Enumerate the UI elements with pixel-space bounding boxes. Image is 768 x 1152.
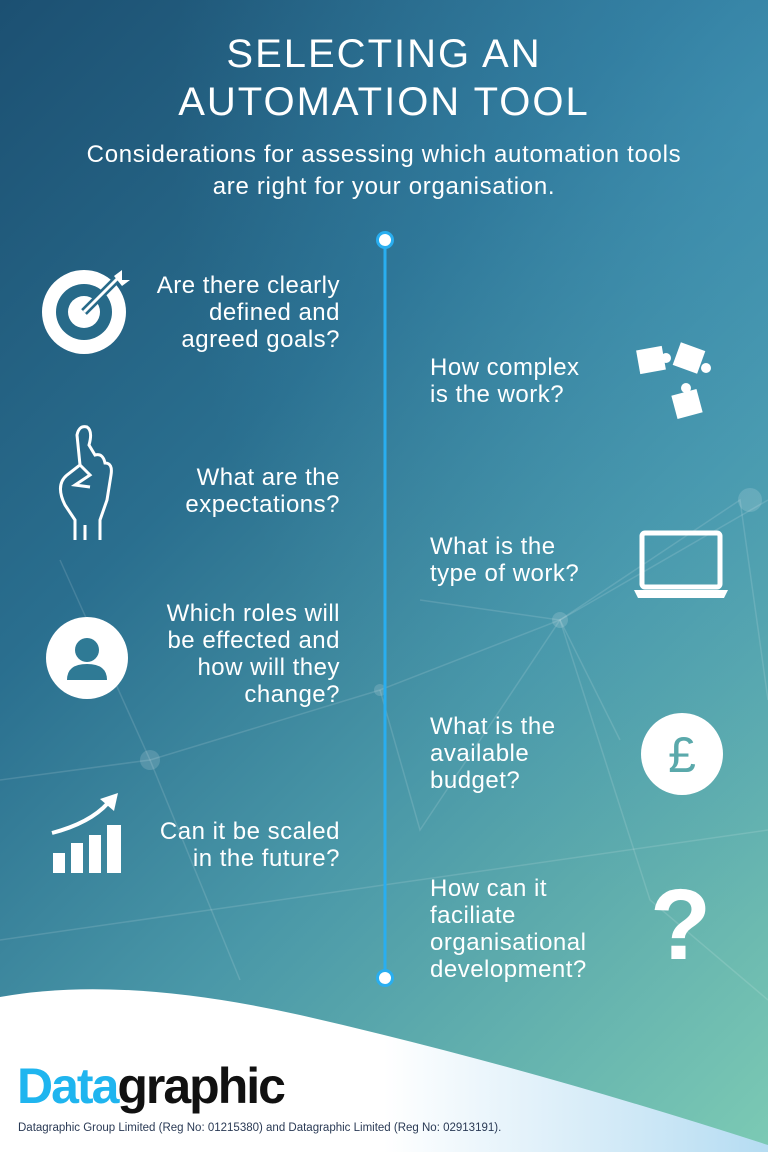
text: budget: available (430, 740, 529, 767)
text: goals: defined and (209, 299, 340, 326)
text: type of work (430, 533, 579, 587)
text: development: How can it (430, 875, 547, 902)
text: expectations (185, 464, 340, 518)
icon: question mark: ? (650, 869, 711, 981)
title (178, 32, 590, 124)
text: development: development? (430, 956, 587, 983)
text: scaled: in the future? (193, 845, 340, 872)
title: SELECTING AN (226, 32, 542, 76)
icon: crossed fingers (58, 425, 113, 540)
subtitle: are right for your organisation. (213, 173, 555, 200)
text: complex (430, 354, 580, 408)
footer wave (0, 989, 768, 1152)
text: goals: Are there clearly (157, 272, 340, 299)
text: goals: agreed goals? (181, 326, 340, 353)
text: budget: What is the (430, 713, 556, 740)
icon: growth chart (52, 793, 121, 873)
text: goals (156, 272, 340, 353)
logo: Datagraphic (17, 1058, 284, 1114)
subtitle: Considerations for assessing which automation tools (87, 141, 681, 168)
text: roles: how will they (197, 654, 340, 681)
text: complex: is the work? (430, 381, 564, 408)
icon: laptop (634, 530, 728, 598)
subtitle (87, 141, 681, 200)
text: budget: budget? (430, 767, 520, 794)
timeline (376, 231, 394, 987)
text: complex: How complex (430, 354, 580, 381)
icon: pound (641, 713, 723, 795)
text: development (430, 875, 587, 983)
icon: puzzle (636, 342, 711, 419)
text: scaled (160, 818, 340, 872)
icon: pound: £ (668, 727, 696, 783)
text: roles: change? (244, 681, 340, 708)
text: roles (166, 600, 340, 708)
text: development: faciliate (430, 902, 516, 929)
text: development: organisational (430, 929, 586, 956)
title: AUTOMATION TOOL (178, 80, 590, 124)
icon: person (46, 617, 128, 699)
text: type of work: What is the (430, 533, 556, 560)
text: roles: be effected and (167, 627, 340, 654)
text: scaled: Can it be scaled (160, 818, 340, 845)
text: budget (430, 713, 556, 794)
text: roles: Which roles will (167, 600, 340, 627)
text: type of work: type of work? (430, 560, 579, 587)
text: expectations: What are the (197, 464, 340, 491)
text: expectations: expectations? (185, 491, 340, 518)
footer text: Datagraphic Group Limited (Reg No: 01215380) and Datagraphic Limited (Reg No: 02913191). (18, 1122, 501, 1134)
icon: target (42, 270, 130, 354)
